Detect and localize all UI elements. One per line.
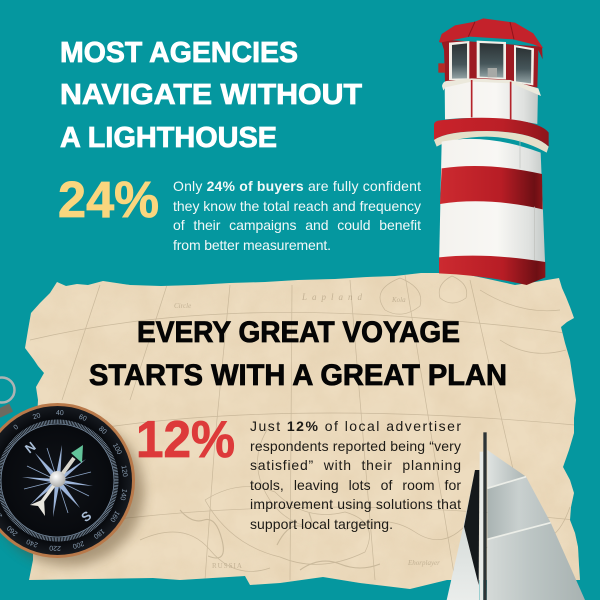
panel: torn map paper	[25, 273, 580, 589]
compass ring loop	[0, 378, 14, 418]
compass dial scale: 120	[120, 465, 128, 478]
compass north and south letters: S	[78, 508, 95, 525]
text block: planning tools: support local targeting.	[250, 516, 393, 532]
text block: buyers confidence: from better measurement.	[173, 237, 331, 253]
heading: every great voyage: STARTS WITH A GREAT PLAN	[89, 359, 507, 392]
panel: torn map paper: Ehorplayer	[407, 559, 440, 567]
jib sail	[447, 470, 479, 600]
text block: planning tools: tools, leaving lots of room for	[250, 477, 461, 493]
compass north and south letters	[22, 439, 95, 525]
text block: planning tools: improvement using solutions that	[250, 496, 461, 512]
compass dial scale: 20	[32, 412, 42, 421]
text block: buyers confidence: they know the total reach and frequency	[173, 198, 421, 214]
compass shadow	[0, 418, 144, 566]
compass dial scale: 100	[111, 442, 123, 456]
compass dial scale: 60	[78, 414, 88, 423]
compass north and south letters: N	[22, 439, 39, 456]
lighthouse lantern room	[438, 39, 543, 87]
compass dial scale: 80	[97, 425, 108, 436]
icon: lighthouse	[434, 18, 549, 285]
compass dial scale: 220	[49, 544, 61, 551]
compass dial scale: 0	[13, 424, 20, 432]
heading: most agencies	[60, 37, 362, 154]
text block: planning tools: respondents reported being “very	[250, 438, 461, 454]
compass dial scale: 260	[6, 524, 19, 537]
compass dial scale: 180	[92, 527, 106, 540]
compass dial scale: 200	[71, 539, 85, 549]
lighthouse tower	[434, 131, 549, 153]
icon: sailboat	[447, 432, 585, 600]
heading: most agencies: MOST AGENCIES	[60, 37, 298, 69]
text block: planning tools: Just 12% of local advertiser	[250, 418, 461, 434]
stat: 24%: 24%	[58, 171, 159, 228]
panel: torn map paper: Kola	[391, 296, 406, 304]
text block: buyers confidence: of their campaigns and could benefit	[173, 217, 421, 233]
heading: most agencies: NAVIGATE WITHOUT	[60, 79, 362, 111]
compass needle	[30, 445, 83, 516]
compass dial scale: 240	[26, 537, 39, 548]
heading: every great voyage	[89, 316, 507, 392]
main sail	[487, 450, 585, 600]
compass dial scale	[0, 410, 128, 551]
panel: torn map paper: RUSSIA	[212, 562, 243, 570]
text block: buyers confidence	[173, 178, 421, 253]
lighthouse roof	[439, 18, 543, 48]
compass dial scale: 140	[118, 488, 128, 501]
panel: torn map paper: Circle	[174, 302, 191, 310]
lighthouse red balcony	[434, 118, 549, 147]
lighthouse upper gallery	[445, 80, 538, 124]
heading: every great voyage: EVERY GREAT VOYAGE	[137, 316, 460, 349]
heading: most agencies: A LIGHTHOUSE	[60, 122, 277, 154]
text block: planning tools	[250, 418, 461, 532]
compass star	[22, 445, 93, 517]
text block: buyers confidence: Only 24% of buyers are fully confident	[173, 178, 421, 194]
icon: compass	[0, 378, 144, 566]
panel: torn map paper: Lapland	[301, 292, 367, 302]
text block: planning tools: satisfied” with their planning	[250, 457, 461, 473]
mast	[480, 432, 487, 600]
compass case	[0, 404, 134, 556]
stat: 12%: 12%	[136, 411, 235, 469]
compass dial scale: 40	[56, 410, 64, 417]
compass dial scale: 160	[108, 509, 120, 523]
